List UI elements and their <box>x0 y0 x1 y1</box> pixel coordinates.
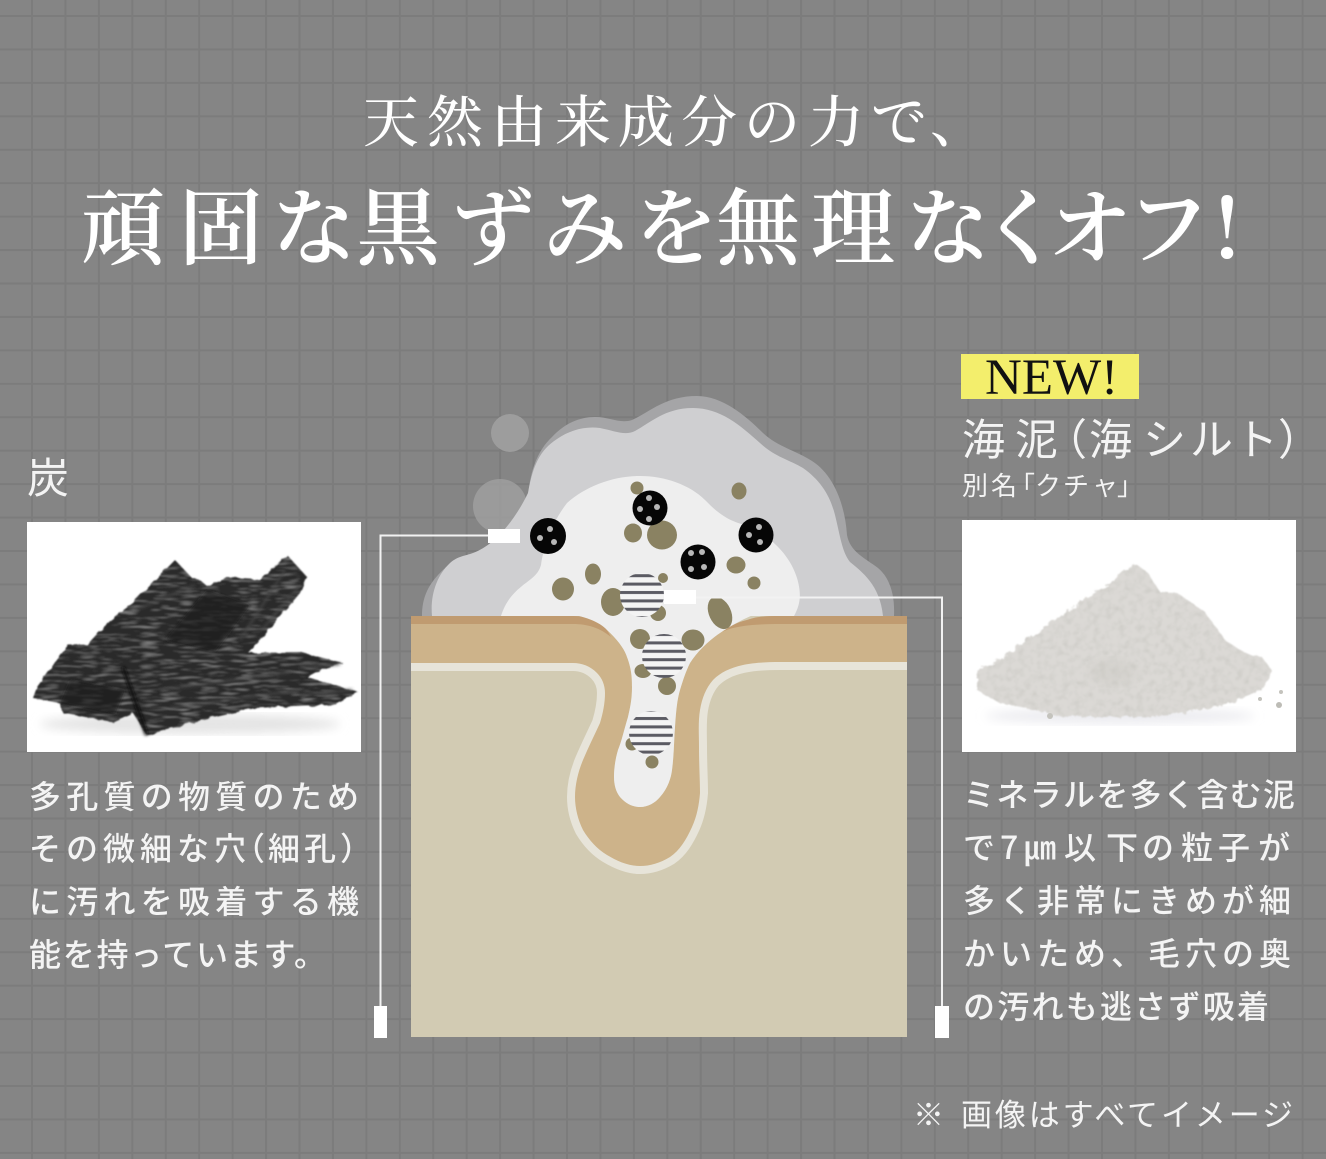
title: line 1: 天然由来成分の力で、 <box>363 79 986 159</box>
text: charcoal description: その微細な穴（細孔） <box>29 824 372 870</box>
title: line 2: 頑固な黒ずみを無理なくオフ! <box>81 162 1241 283</box>
bubbles <box>473 414 529 533</box>
inner cloud <box>432 408 883 616</box>
skin top layer <box>411 616 907 637</box>
pore channel <box>560 612 760 807</box>
skin pale edge <box>400 662 920 866</box>
white foam <box>501 476 800 616</box>
black charcoal particles <box>530 490 774 580</box>
text: sea silt description: かいため、毛穴の奥 <box>963 929 1291 975</box>
text: sea silt description <box>963 770 1295 1028</box>
subheading: alias: 別名「クチャ」 <box>962 466 1143 503</box>
text: sea silt description: 多く非常にきめが細 <box>963 876 1291 922</box>
text: charcoal description <box>29 772 372 976</box>
badge: NEW: NEW! <box>985 350 1118 406</box>
footnote: 画像はすべてイメージ <box>961 1090 1293 1135</box>
photo: charcoal <box>27 522 361 752</box>
heading: sea silt: 海泥（海シルト） <box>962 406 1321 468</box>
olive clay particles <box>552 482 760 768</box>
text: sea silt description: の汚れも逃さず吸着 <box>963 982 1269 1028</box>
text: charcoal description: 能を持っています。 <box>29 930 326 976</box>
heading: charcoal: 炭 <box>27 445 69 506</box>
text: sea silt description: で7㎛以下の粒子が <box>963 823 1290 869</box>
skin base <box>411 616 907 1037</box>
callout line: charcoal <box>374 529 520 1038</box>
text: charcoal description: 多孔質の物質のため <box>29 772 359 818</box>
outer cloud <box>422 396 894 616</box>
photo: sea silt powder <box>962 520 1296 752</box>
striped silt particles <box>620 574 686 754</box>
skin layer <box>411 616 907 866</box>
footnote: ※ <box>913 1090 944 1135</box>
text: sea silt description: ミネラルを多く含む泥 <box>963 770 1295 816</box>
text: charcoal description: に汚れを吸着する機 <box>29 877 359 923</box>
diagram: pore cleansing <box>400 396 920 1037</box>
callout line: sea silt <box>664 590 949 1038</box>
